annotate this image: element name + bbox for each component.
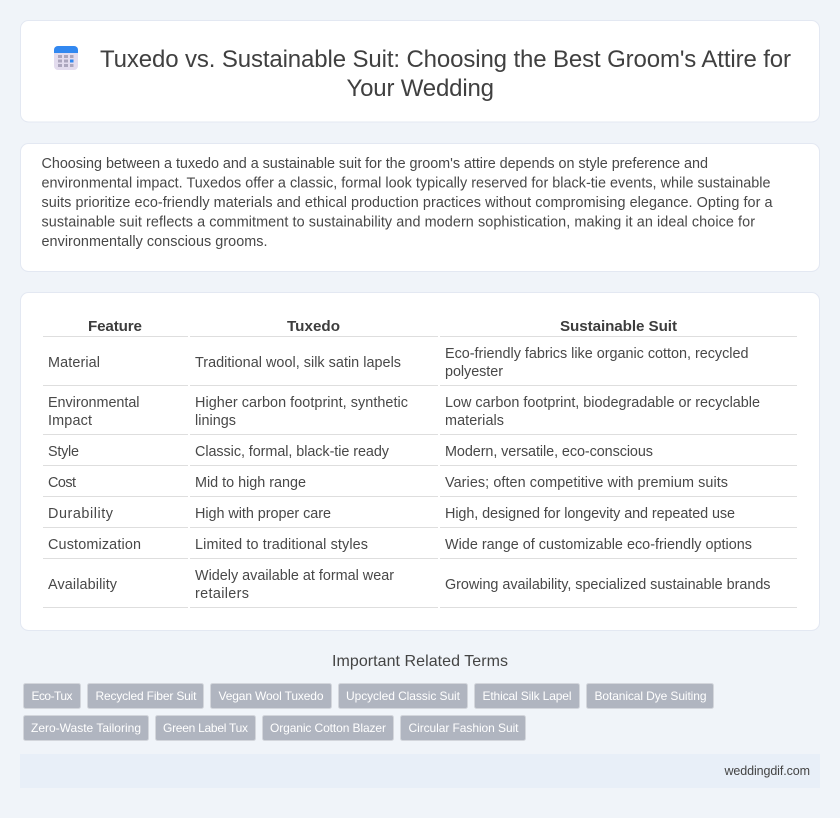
row: availability: Growing availability, specialized sustainable brands: [445, 577, 770, 593]
row: material: Material: [48, 355, 100, 371]
row: durability: [48, 506, 735, 522]
row: availability: [48, 568, 770, 602]
row: availability: Availability: [48, 577, 118, 593]
intro panel: [20, 144, 820, 272]
row: durability: Durability: [48, 506, 114, 522]
row: customization: Wide range of customizable eco-friendly options: [445, 537, 752, 553]
related term tags: Eco-Tux: [32, 689, 72, 703]
row: cost: Varies; often competitive with premium suits: [445, 475, 728, 491]
title: [100, 46, 791, 102]
table header: Sustainable Suit: [560, 318, 677, 335]
row: availability: retailers: [195, 586, 249, 602]
row: material: Eco-friendly fabrics like organic cotton, recycled: [445, 346, 748, 362]
intro text: [42, 156, 772, 250]
intro text: environmentally conscious grooms.: [42, 234, 268, 250]
icon: calendar: [54, 46, 78, 70]
row: cost: Cost: [48, 475, 76, 491]
table header: [88, 318, 677, 335]
row: material: polyester: [445, 364, 503, 380]
row: durability: High, designed for longevity and repeated use: [445, 506, 735, 522]
header panel: [20, 20, 820, 122]
row: environmental impact: Low carbon footprint, biodegradable or recyclable: [445, 395, 760, 411]
related term tags: [24, 684, 714, 740]
related term tags: Ethical Silk Lapel: [482, 689, 572, 703]
table header: Tuxedo: [287, 318, 340, 335]
related term tags: Zero-Waste Tailoring: [31, 721, 141, 735]
row: cost: Mid to high range: [195, 475, 306, 491]
row: environmental impact: Higher carbon footprint, synthetic: [195, 395, 408, 411]
related term tags: Vegan Wool Tuxedo: [218, 689, 324, 703]
related term tags: Recycled Fiber Suit: [96, 689, 197, 703]
row: customization: Customization: [48, 537, 141, 553]
intro text: sustainable suit reflects a commitment to sustainability and modern sophistication, making it an ideal choice for: [42, 214, 755, 230]
related terms heading: Important Related Terms: [332, 653, 508, 670]
footer bar: [20, 754, 820, 788]
row: environmental impact: [48, 395, 760, 429]
table header: Feature: [88, 318, 142, 335]
row: environmental impact: Environmental: [48, 395, 140, 411]
row: style: Classic, formal, black-tie ready: [195, 444, 390, 460]
row: style: Style: [48, 444, 79, 460]
footer source text: weddingdif.com: [724, 764, 810, 778]
related term tags: Green Label Tux: [163, 721, 248, 735]
row: customization: [48, 537, 752, 553]
row: durability: High with proper care: [195, 506, 331, 522]
title: Tuxedo vs. Sustainable Suit: Choosing the Best Groom's Attire for: [100, 46, 791, 73]
intro text: Choosing between a tuxedo and a sustainable suit for the groom's attire depends on style preference and: [42, 156, 708, 172]
row: style: Modern, versatile, eco-conscious: [445, 444, 653, 460]
intro text: suits prioritize eco-friendly materials and ethical production practices without compromising elegance. Opting for a: [42, 195, 772, 211]
row: environmental impact: Impact: [48, 413, 92, 429]
related term tags: Upcycled Classic Suit: [346, 689, 461, 703]
row: availability: Widely available at formal wear: [195, 568, 394, 584]
row: material: Traditional wool, silk satin lapels: [195, 355, 401, 371]
comparison table panel: [20, 292, 820, 630]
related term tags: Botanical Dye Suiting: [594, 689, 706, 703]
row: environmental impact: materials: [445, 413, 504, 429]
intro text: environmental impact. Tuxedos offer a classic, formal look typically reserved for black-tie events, while sustainable: [42, 176, 770, 192]
row: style: [48, 444, 653, 460]
row: customization: Limited to traditional styles: [195, 537, 368, 553]
title: Your Wedding: [346, 75, 494, 102]
related term tags: Organic Cotton Blazer: [270, 721, 386, 735]
related term tags: Circular Fashion Suit: [408, 721, 519, 735]
row: material: [48, 346, 748, 380]
row: environmental impact: linings: [195, 413, 236, 429]
row: cost: [48, 475, 728, 491]
